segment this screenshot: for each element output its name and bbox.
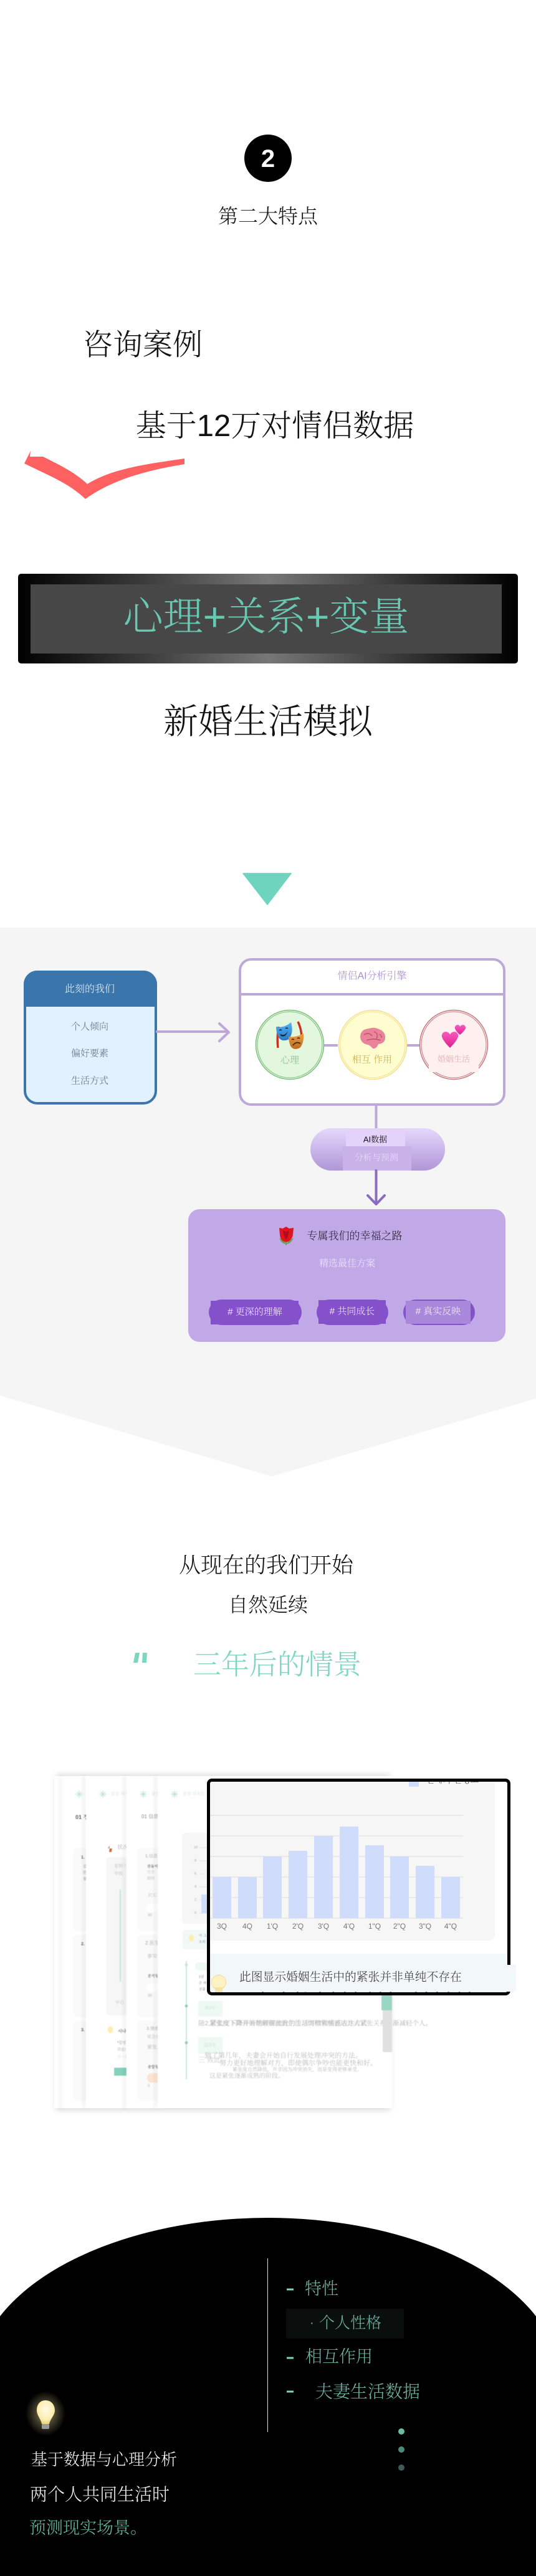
report page 3: 꿀잠: [151, 1790, 160, 1797]
report page 2: *감성: [117, 2040, 126, 2045]
bar chart: 4'Q: [343, 1922, 355, 1931]
panel: dark summary dome: [0, 2218, 536, 2576]
report page 4: 은 싸: [199, 1980, 207, 1985]
bar chart: 4Q: [242, 1922, 252, 1931]
report page 3: [123, 1776, 164, 2108]
report page 2: [82, 1776, 142, 2108]
callout: chart explanation: 즉 서로가 맞추어 가면서 생겨나는 긴장감입니다: [241, 1992, 473, 2004]
list: data factors: 相互作用: [305, 2347, 373, 2366]
report page 4: 오히: [199, 1939, 206, 1944]
report page 3: 1.信息: [145, 1853, 158, 1859]
report page 4: 三 致此: [198, 2055, 221, 2064]
report page 4: 第2年: [204, 2005, 216, 2011]
report page 2: 星期六: [114, 1863, 127, 1869]
icon: quote mark: [133, 1653, 147, 1663]
icon: brain: [360, 1028, 385, 1048]
icon: pale bulb: [212, 1975, 226, 1992]
report page 3: 其实: [148, 1893, 156, 1898]
report page 1: [59, 1776, 100, 2108]
bar chart: 4"Q: [444, 1922, 457, 1931]
panel: gray flow background: [0, 928, 536, 1476]
list: data factors: ·: [310, 2316, 314, 2330]
bar chart: [210, 1782, 495, 1941]
report page 2: 另一方面: [117, 2055, 132, 2060]
report page 1: 1.: [81, 1855, 85, 1860]
report page 3: 01 信息: [141, 1813, 158, 1819]
panel: AI data pill: [310, 1128, 445, 1171]
bar chart: 1"Q: [368, 1922, 381, 1931]
consulting case heading: 咨询案例: [83, 329, 203, 361]
arrow: to analysis engine: [157, 1024, 229, 1041]
text: summary statement: [29, 2450, 177, 2537]
list: data factors: 个人性格: [319, 2314, 381, 2332]
report page 2: 甲级: [114, 1870, 123, 1876]
bar chart: 1'Q: [267, 1922, 278, 1931]
report page 4: 随2,紧张度下降并开始理解彼此的生活习惯和情感表达方式: [198, 2019, 368, 2027]
text: summary statement: 两个人共同生活时: [30, 2484, 170, 2504]
report page 4: 8: [194, 1859, 196, 1863]
report page 1: 2.: [81, 1942, 85, 1946]
panel: current us: 个人倾向: [71, 1022, 108, 1032]
tag: growing together: # 共同成长: [330, 1306, 375, 1317]
report page 4: 1년: [199, 1974, 204, 1979]
report pages stack: [0, 1769, 536, 2576]
panel: current us: 偏好要素: [71, 1048, 108, 1059]
report page 3: 3.情感: [146, 2026, 159, 2031]
report page 1: 3.: [81, 2028, 85, 2032]
panel: couple AI analysis engine: 情侣AI分析引擎: [337, 971, 407, 982]
report page 3: 紧急们: [147, 2033, 160, 2040]
bar chart: 3Q: [217, 1922, 227, 1931]
report page 2: 꿀잠 리포트: [111, 1790, 133, 1797]
text: continuing from now: [179, 1554, 354, 1616]
connector to AI data pill: [375, 1106, 378, 1128]
report page 4: 到了第几年，夫妻会开始自行发展处理冲突的方法。: [204, 2051, 362, 2060]
bar chart: 전체의 안정도: [426, 1775, 479, 1785]
circle: psychology: [256, 1010, 324, 1079]
decorative dots: [398, 2428, 404, 2471]
report page 3: 紧张度: [147, 2043, 162, 2050]
banner: psychology + relationship + variables: 心理+关系+变量: [123, 594, 409, 639]
report page 4: 努力更好地理解对方，即使偶尔争吵也能更快和好。: [219, 2058, 377, 2067]
panel: AI data pill: 分析与预测: [355, 1153, 398, 1162]
report page 4: 紧张度自然降低，并非因为冲突消失，而是变得更够承受。: [232, 2066, 362, 2073]
chart device frame: [207, 1779, 510, 1995]
report page 4: 진풀: [199, 1987, 206, 1992]
report page 4: 2: [194, 1898, 196, 1902]
report page 3: 30: [148, 1994, 152, 1998]
icon: theater masks: [276, 1022, 304, 1049]
panel: couple AI analysis engine: [240, 959, 504, 1105]
text: summary statement: 基于数据与心理分析: [31, 2450, 177, 2469]
report page 2: 甜蜜!: [117, 2047, 126, 2052]
circle: interaction: [339, 1010, 406, 1079]
heading: newlywed life simulation: 新婚生活模拟: [163, 701, 373, 741]
report page 4: 这是紧张逐渐成熟的阶段。: [209, 2072, 284, 2079]
icon: rose: [279, 1227, 294, 1245]
report page 4: 第3年: [204, 2042, 216, 2048]
text: continuing from now: 从现在的我们开始: [179, 1554, 354, 1577]
text: summary statement: 预测现实场景。: [29, 2519, 147, 2537]
step number badge: 2: [261, 145, 275, 173]
report page 3: 0: [148, 2084, 150, 2088]
section heading: 第二大特点: [218, 205, 318, 227]
bar chart: 2'Q: [292, 1922, 304, 1931]
panel: current us: 生活方式: [71, 1075, 108, 1086]
text: continuing from now: 自然延续: [228, 1594, 308, 1616]
report page 2: 시나: [118, 2028, 127, 2033]
arrow: to result panel: [368, 1171, 385, 1204]
heading: three years later: 三年后的情景: [193, 1648, 361, 1681]
report page 4: 6: [194, 1872, 196, 1876]
report page 4: [154, 1776, 432, 2108]
tag: true reflection: # 真实反映: [416, 1306, 461, 1317]
circle: interaction: 相互 作用: [352, 1054, 392, 1065]
icon: two hearts: [442, 1025, 466, 1048]
bar chart: 3'Q: [318, 1922, 329, 1931]
banner: psychology + relationship + variables: [18, 574, 518, 663]
icon: down triangle: [243, 873, 291, 905]
report page 3: 권돌이: [147, 1864, 158, 1869]
report page 3: 30: [148, 1914, 152, 1918]
tag: growing together: [317, 1300, 388, 1325]
icon: red check stroke: [24, 451, 184, 499]
report page 4: 꿀잠 리포트: [183, 1790, 205, 1797]
report page 4: 0: [194, 1911, 196, 1915]
report page 3: 事实报: [147, 1952, 162, 1959]
callout: chart explanation: 此图显示婚姻生活中的紧张并非单纯不存在: [239, 1970, 462, 1984]
tag: true reflection: [403, 1300, 475, 1325]
circle: married life: 婚姻生活: [438, 1054, 470, 1064]
report page 4: 4: [194, 1885, 196, 1889]
report page 4: 紧张度下降开始理解彼此的生活习惯和情感表达方式紧张关系逐渐减轻个人。: [209, 2019, 432, 2027]
report page 4: 10: [194, 1846, 198, 1850]
panel: our own path to happiness: [188, 1209, 505, 1342]
report page 1: 칠: [83, 1876, 87, 1881]
report page 3: 2.医生: [145, 1940, 160, 1946]
report page 3: 종합형: [148, 2065, 158, 2070]
step number badge: [244, 135, 292, 182]
list: data factors: 夫妻生活数据: [315, 2382, 420, 2401]
circle: married life: [420, 1010, 487, 1079]
list: data factors: 特性: [305, 2279, 338, 2298]
panel: our own path to happiness: 精选最佳方案: [319, 1258, 375, 1268]
data basis heading: 基于12万对情侣数据: [136, 409, 414, 443]
icon: lit light bulb: [26, 2391, 65, 2436]
report page 1: 01 정: [75, 1813, 89, 1820]
callout: chart explanation: [239, 1965, 516, 1992]
report page 3: 狠抖: [147, 1876, 155, 1881]
report page 3: 完全: [147, 1870, 155, 1875]
panel: current us: [24, 971, 157, 1103]
report page 1: 한: [83, 1870, 87, 1875]
report page 3: 분석형: [148, 1974, 158, 1979]
tag: deeper understanding: # 更深的理解: [227, 1307, 282, 1317]
tag: deeper understanding: [209, 1300, 302, 1325]
divider line: [267, 2258, 268, 2432]
list: data factors: [286, 2279, 420, 2401]
report page 2: 甲石: [115, 2000, 124, 2005]
circle: psychology: 心理: [280, 1055, 299, 1065]
bar chart: 3"Q: [419, 1922, 431, 1931]
panel: our own path to happiness: 专属我们的幸福之路: [307, 1230, 403, 1242]
panel: current us: 此刻的我们: [65, 983, 115, 994]
bar chart: 2"Q: [393, 1922, 406, 1931]
report page 2: 状况: [117, 1843, 128, 1850]
panel: AI data pill: AI数据: [363, 1135, 387, 1144]
report page 4: 이 그: [199, 1933, 207, 1938]
report page 1: 감: [83, 1864, 87, 1869]
